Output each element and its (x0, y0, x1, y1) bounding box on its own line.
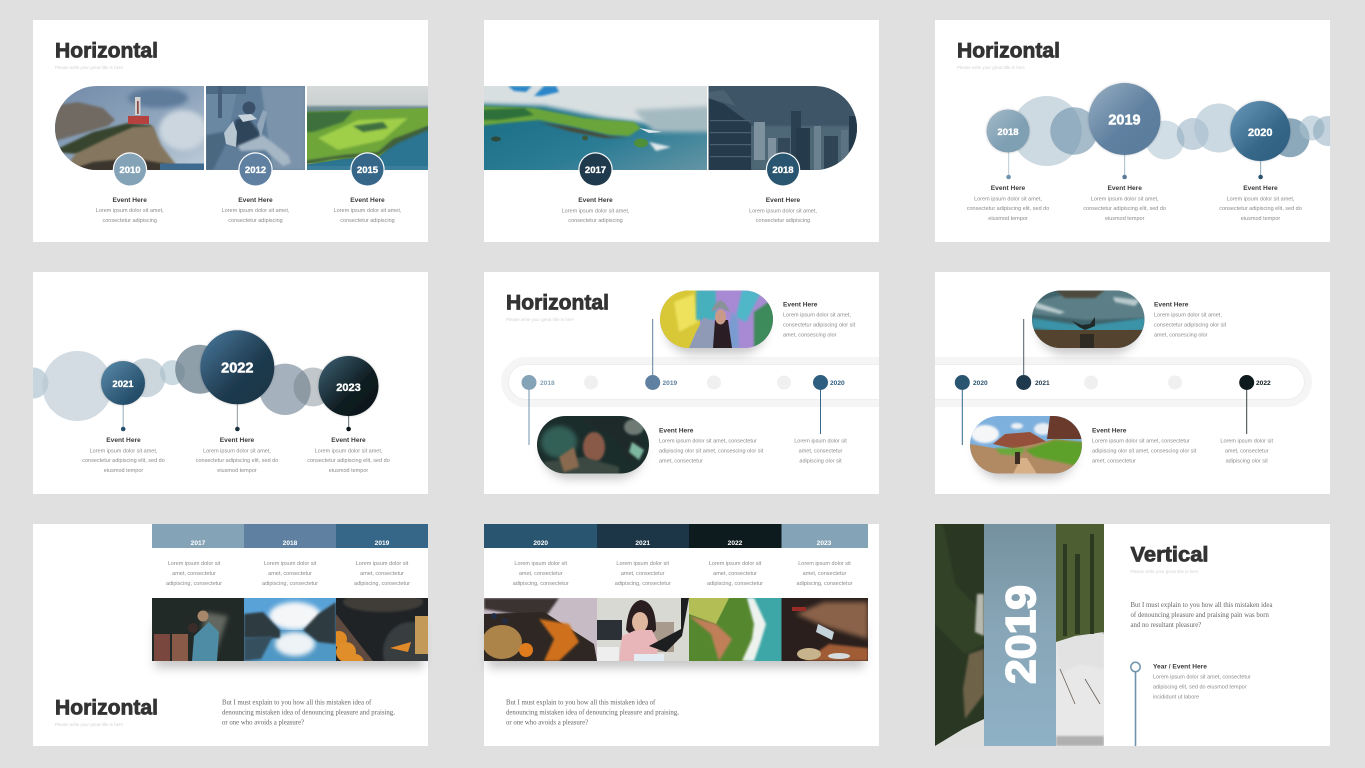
heading: Horizontal: Horizontal (506, 290, 609, 314)
event text: 2022: amet, consectetur (1225, 449, 1269, 455)
marker: 2022 (200, 330, 274, 404)
event text: 2012: Event Here (238, 197, 273, 204)
photo: pancakes with oranges (482, 598, 597, 661)
marker: 2015: 2015 (357, 165, 379, 176)
year band (984, 524, 1056, 746)
panel: slide 9 vertical timeline 2019 (935, 524, 1330, 746)
event text: 2019 (1083, 185, 1166, 222)
photo: green coastline (307, 86, 428, 170)
event text: 2019: Lorem ipsum dolor sit amet, (1091, 196, 1159, 202)
event text: 2017 (562, 197, 630, 224)
marker: 2020: 2020 (1248, 127, 1273, 139)
shadow under pills (976, 302, 1138, 479)
column text: 2021: Lorem ipsum dolor sit (616, 561, 669, 567)
column text: 2023: adipiscing, consectetur (797, 581, 853, 587)
event text: 2019: Event Here (1107, 185, 1142, 192)
column header: 2017: 2017 (191, 540, 206, 547)
marker: 2021 (1016, 319, 1050, 390)
heading: Horizontal: Horizontal (55, 38, 158, 62)
marker: 2018: 2018 (772, 165, 794, 176)
marker: 2020 (955, 375, 988, 445)
panel: slide 3 bubble timeline 2018-2020 (935, 20, 1343, 242)
column text: 2019 (354, 561, 410, 587)
marker: 2017 (578, 152, 613, 187)
event text: 2023: Lorem ipsum dolor sit amet, (315, 448, 383, 454)
event text: upper: consectetur adipiscing olor sit (783, 323, 856, 329)
subtitle: Please write your great title is here (957, 65, 1025, 70)
event text: 2018: eiusmod tempor (988, 216, 1028, 222)
marker: 2020: 2020 (973, 380, 988, 387)
event text: 2017: Event Here (578, 197, 613, 204)
event text: upper: Event Here (783, 302, 818, 308)
marker: 2010 (113, 152, 147, 187)
column text: 2019: adipiscing, consectetur (354, 581, 410, 587)
paragraph: But I must explain to you how all this mistaken idea (1130, 602, 1272, 609)
event text: adipiscing elit, sed do eiusmod tempor (1153, 685, 1247, 691)
event text: 2022 (1220, 439, 1273, 464)
column text: 2020: Lorem ipsum dolor sit (514, 561, 567, 567)
column text: 2021: adipiscing, consectetur (615, 581, 671, 587)
event text: 2022: Event Here (220, 437, 255, 444)
event text: 2020: eiusmod tempor (1241, 216, 1280, 222)
panel: slide 7 column timeline 2017-2019 (33, 524, 439, 746)
column text: 2023 (797, 561, 853, 587)
column header: 2018: 2018 (283, 540, 298, 547)
upcoming dots (1084, 376, 1182, 390)
heading: Horizontal: Horizontal (55, 696, 158, 720)
event text: 2022: Lorem ipsum dolor sit (1220, 439, 1273, 445)
event text: 2018: Event Here (766, 197, 801, 204)
event text: upper: Event Here (1154, 302, 1189, 308)
photo: girl at table (597, 598, 689, 661)
event text: 2015: consectetur adipiscing (340, 218, 395, 224)
event text: 2018: consectetur adipiscing elit, sed do (967, 206, 1049, 212)
column text: 2017: adipiscing, consectetur (166, 581, 222, 587)
paragraph: and no resultant pleasure? (1130, 622, 1201, 629)
column header: 2018 (244, 524, 336, 548)
event text: 2018: Lorem ipsum dolor sit amet, (749, 208, 817, 214)
event text: 2021: Event Here (106, 437, 141, 444)
event text: incididunt ut labore (1153, 694, 1199, 700)
subtitle: Please write your great title is here (1130, 569, 1199, 574)
photo pill: turtle underwater (1032, 290, 1145, 348)
column text: 2022 (707, 561, 763, 587)
panel: slide 8 column timeline 2020-2023 (482, 524, 879, 746)
panel: slide 6 pill track timeline 2020-2022 (935, 272, 1330, 494)
paragraph: denouncing mistaken idea of denouncing pleasure and praising, (506, 710, 679, 716)
column text: 2020: amet, consectetur (519, 571, 563, 577)
event text: 2023: Event Here (331, 437, 366, 444)
subtitle: Please write your great title is here (55, 722, 123, 727)
event text: lower: Lorem ipsum dolor sit amet, consectetur (659, 439, 757, 445)
event text: lower (659, 428, 764, 464)
event text: upper: amet, consescing olor (783, 332, 837, 338)
event text: 2010 (96, 197, 164, 224)
marker: 2021: 2021 (1035, 380, 1050, 387)
paragraph (222, 700, 395, 726)
event text: 2020: Event Here (1243, 185, 1278, 192)
paragraph: denouncing mistaken idea of denouncing pleasure and praising, (222, 710, 395, 716)
timeline marker (1131, 662, 1140, 746)
marker: 2010: 2010 (119, 165, 141, 176)
column text: 2018: Lorem ipsum dolor sit (264, 561, 317, 567)
decorative bubble band (18, 345, 332, 421)
column header: 2017 (152, 524, 244, 548)
column text: 2020 (513, 561, 569, 587)
event text: 2015: Lorem ipsum dolor sit amet, (334, 208, 402, 214)
panel: slide 2 horizontal photo strip 2017-2018 (476, 20, 879, 242)
event text: 2021: eiusmod tempor (104, 468, 143, 474)
event text: 2018 (749, 197, 817, 224)
heading: Horizontal: Horizontal (957, 38, 1060, 62)
photo: palms reflected in pool (244, 598, 336, 661)
paragraph: or one who avoids a pleasure? (506, 719, 588, 726)
upcoming dots (584, 376, 791, 390)
event text: 2018 (967, 185, 1049, 222)
panel: slide 5 pill track timeline 2018-2020 (484, 272, 879, 494)
photo: oranges and pancakes (336, 598, 428, 661)
event text: 2021: consectetur adipiscing elit, sed do (82, 458, 165, 464)
event text: 2021 (82, 437, 165, 474)
marker: 2015 (350, 152, 385, 187)
photo pill: woman by graffiti (660, 290, 776, 348)
event text: 2012: consectetur adipiscing (228, 218, 283, 224)
column text: 2018: adipiscing, consectetur (262, 581, 318, 587)
photo pill: woman among leaves (537, 416, 649, 474)
event text: 2023: consectetur adipiscing elit, sed do (307, 458, 390, 464)
marker: 2022: 2022 (221, 361, 253, 377)
event text: 2020: adipiscing olor sit (799, 458, 842, 464)
event text: lower: adipiscing olor sit amet, consescing olor sit (659, 449, 764, 455)
event text: 2015 (334, 197, 402, 224)
marker: 2021: 2021 (112, 379, 134, 390)
event text: lower (1092, 428, 1197, 464)
photo: aerial coastline (689, 598, 782, 661)
event text: lower: Event Here (659, 428, 694, 434)
event text: 2018: Lorem ipsum dolor sit amet, (974, 196, 1042, 202)
stems and dots (121, 404, 351, 431)
subtitle: Please write your great title is here (55, 65, 123, 70)
event text: Lorem ipsum dolor sit amet, consectetur (1153, 675, 1251, 681)
paragraph: of denouncing pleasure and praising pain was born (1130, 612, 1269, 619)
event text: 2022: adipiscing olor sit (1226, 458, 1268, 464)
photo: aerial island coast (484, 86, 707, 170)
paragraph (506, 700, 679, 726)
marker: 2019 (645, 319, 678, 390)
column text: 2022: adipiscing, consectetur (707, 581, 763, 587)
event text: lower: adipiscing olor sit amet, consescing olor sit (1092, 449, 1197, 455)
event text: 2012: Lorem ipsum dolor sit amet, (222, 208, 290, 214)
photo: lighthouse on cliff (55, 86, 204, 170)
event text: 2017: Lorem ipsum dolor sit amet, (562, 208, 630, 214)
column header: 2021: 2021 (635, 540, 650, 547)
subtitle: Please write your great title is here (506, 317, 574, 322)
event text: upper: Lorem ipsum dolor sit amet, (783, 313, 851, 319)
track (875, 361, 1308, 403)
marker: 2022 (1239, 375, 1271, 434)
photo: couple in forest (152, 598, 244, 661)
marker: 2018 (986, 110, 1030, 152)
marker: 2018: 2018 (540, 380, 555, 387)
column text: 2022: Lorem ipsum dolor sit (709, 561, 762, 567)
column header: 2022 (689, 524, 782, 548)
big year: 2019: 2019 (997, 585, 1044, 684)
paragraph: or one who avoids a pleasure? (222, 719, 304, 726)
panel: slide 4 bubble timeline 2021-2023 (18, 272, 428, 494)
event text: 2018: consectetur adipiscing (756, 218, 810, 224)
column text: 2019: amet, consectetur (360, 571, 404, 577)
event text: 2015: Event Here (350, 197, 385, 204)
event text: 2010: Lorem ipsum dolor sit amet, (96, 208, 164, 214)
marker: 2020: 2020 (830, 380, 845, 387)
marker: 2020 (1230, 101, 1290, 161)
column header: 2023: 2023 (817, 540, 832, 547)
marker: 2012 (238, 152, 273, 187)
event text: 2019: eiusmod tempor (1105, 216, 1145, 222)
marker: 2017: 2017 (585, 165, 606, 176)
marker: 2018: 2018 (997, 127, 1019, 138)
marker: 2019: 2019 (662, 380, 678, 387)
photo pill: canyon hiker (970, 416, 1082, 474)
event text: 2022: Lorem ipsum dolor sit amet, (203, 448, 271, 454)
event text: lower: amet, consectetur (1092, 458, 1136, 464)
event text: 2019: consectetur adipiscing elit, sed do (1083, 206, 1166, 212)
shadow under pills (543, 302, 766, 479)
marker: 2019 (1088, 83, 1160, 155)
event text: 2022: eiusmod tempor (217, 468, 257, 474)
event text: 2022: consectetur adipiscing elit, sed do (196, 458, 278, 464)
event text: 2023 (307, 437, 390, 474)
event text: 2020: consectetur adipiscing elit, sed do (1219, 206, 1302, 212)
column text: 2021 (615, 561, 671, 587)
stems and dots (1006, 151, 1263, 179)
event text: Year / Event Here (1153, 664, 1207, 670)
track (505, 361, 948, 403)
column text: 2018: amet, consectetur (268, 571, 312, 577)
column header: 2023 (782, 524, 868, 548)
column text: 2021: amet, consectetur (621, 571, 665, 577)
photo: snowy pine forest (935, 524, 1104, 746)
event text: 2020: Lorem ipsum dolor sit amet, (1227, 196, 1295, 202)
paragraph: But I must explain to you how all this mistaken idea of (506, 700, 656, 706)
event text: 2018: Event Here (991, 185, 1026, 192)
paragraph (1130, 602, 1272, 629)
event text: 2012 (222, 197, 290, 224)
event text: 2022 (196, 437, 278, 474)
column header: 2019 (336, 524, 428, 548)
column header: 2022: 2022 (728, 540, 743, 547)
column text: 2020: adipiscing, consectetur (513, 581, 569, 587)
event text: lower: Lorem ipsum dolor sit amet, consectetur (1092, 439, 1190, 445)
column text: 2023: Lorem ipsum dolor sit (798, 561, 851, 567)
column text: 2017 (166, 561, 222, 587)
event text: 2020 (794, 439, 847, 464)
event text: 2020: Lorem ipsum dolor sit (794, 439, 847, 445)
photo: city skyline, dark duotone (708, 86, 859, 170)
decorative bubble band (1012, 96, 1343, 166)
shadow under photo row (488, 624, 864, 668)
column header: 2020: 2020 (533, 540, 548, 547)
shadow under photo row (155, 624, 423, 668)
photo: dinner table (782, 598, 868, 661)
event text: upper: consectetur adipiscing olor sit (1154, 323, 1227, 329)
heading: Vertical: Vertical (1130, 542, 1208, 566)
event text: lower: amet, consectetur (659, 458, 703, 464)
marker: 2018 (766, 152, 800, 187)
marker: 2022: 2022 (1256, 380, 1271, 387)
panel: slide 1 horizontal photo strip 2010-2015 (33, 20, 433, 242)
column text: 2023: amet, consectetur (803, 571, 847, 577)
event text: upper: amet, consescing olor (1154, 332, 1208, 338)
column text: 2018 (262, 561, 318, 587)
marker: 2020 (813, 375, 845, 434)
event text: lower: Event Here (1092, 428, 1127, 434)
event text: 2020: amet, consectetur (799, 449, 843, 455)
event text: upper: Lorem ipsum dolor sit amet, (1154, 313, 1222, 319)
marker: 2018 (522, 375, 555, 445)
marker: 2019: 2019 (1108, 112, 1141, 128)
column header: 2020 (484, 524, 597, 548)
event text: 2023: eiusmod tempor (329, 468, 368, 474)
event text: upper (1154, 302, 1227, 338)
column header: 2019: 2019 (375, 540, 390, 547)
marker: 2023: 2023 (336, 382, 361, 394)
event text: 2021: Lorem ipsum dolor sit amet, (90, 448, 158, 454)
event text (1153, 664, 1251, 700)
event text: 2017: consectetur adipiscing (568, 218, 623, 224)
marker: 2023 (318, 356, 378, 416)
event text: 2020 (1219, 185, 1302, 222)
column text: 2019: Lorem ipsum dolor sit (356, 561, 409, 567)
paragraph: But I must explain to you how all this mistaken idea of (222, 700, 372, 706)
marker: 2012: 2012 (245, 165, 266, 176)
marker: 2021 (101, 361, 145, 405)
column text: 2017: Lorem ipsum dolor sit (168, 561, 221, 567)
event text: upper (783, 302, 856, 338)
photo: person sitting, blue duotone (206, 86, 305, 170)
column header: 2021 (597, 524, 689, 548)
column text: 2017: amet, consectetur (172, 571, 216, 577)
column text: 2022: amet, consectetur (713, 571, 757, 577)
event text: 2010: Event Here (112, 197, 147, 204)
event text: 2010: consectetur adipiscing (102, 218, 157, 224)
